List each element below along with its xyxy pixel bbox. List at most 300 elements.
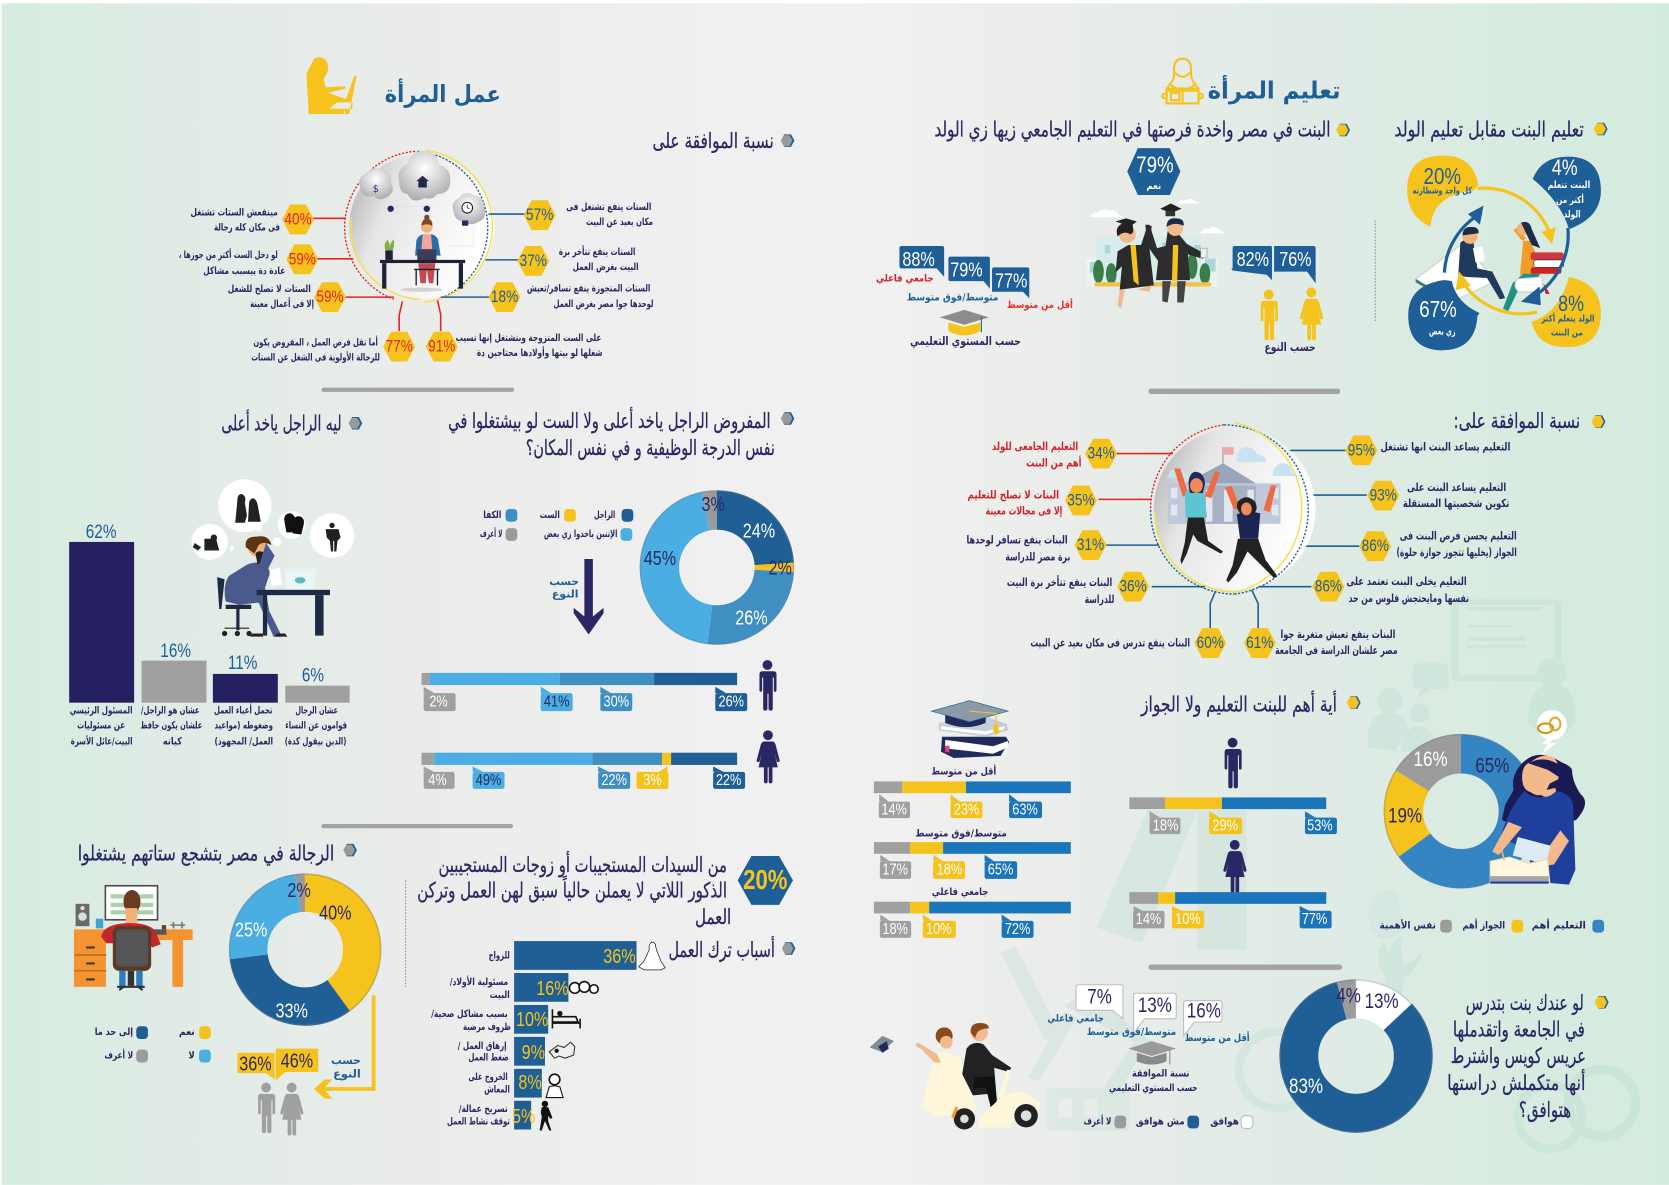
donut labels bbox=[644, 492, 792, 629]
donut labels: 13% bbox=[1365, 990, 1399, 1013]
illustration: graduates bbox=[1086, 199, 1224, 309]
item 59% second child bbox=[179, 244, 353, 277]
blob: 8% boy learns more: الولد يتعلم أكتر bbox=[1540, 312, 1594, 324]
item 35%: إلا فى مجالات معينة bbox=[986, 505, 1062, 518]
statement text: العمل bbox=[695, 905, 731, 930]
stacked bar male: 53% bbox=[1307, 817, 1333, 835]
item 61%: البنات ينفع تعيش متغربة جوا bbox=[1280, 628, 1395, 641]
stacked bar male: 29% bbox=[1212, 817, 1238, 835]
item 59% unfit: الستات لا تصلح للشغل bbox=[228, 284, 311, 295]
label university: جامعي فاعلي bbox=[1047, 1013, 1104, 1024]
bubble 13%: 13% bbox=[1138, 994, 1172, 1018]
donut labels: 24% bbox=[743, 519, 775, 542]
bar retirement: 8% bbox=[518, 1070, 542, 1093]
item 77% bbox=[251, 301, 415, 363]
bar health: 10% bbox=[516, 1007, 548, 1030]
bar labels: البيت/عائل الأسرة bbox=[71, 735, 133, 748]
label below middle: أقل من متوسط bbox=[1007, 298, 1073, 311]
item 36% bbox=[1007, 572, 1205, 606]
item 77%: 77% bbox=[386, 337, 413, 356]
icon: male figure bbox=[1261, 290, 1278, 340]
bar layoffs bbox=[447, 1101, 552, 1131]
donut labels: 2% bbox=[769, 556, 792, 579]
label by gender: حسب النوع bbox=[1265, 340, 1316, 355]
title: women's work bbox=[307, 57, 501, 114]
stacked bar female: 3% bbox=[643, 772, 662, 789]
legend: هوافق bbox=[1210, 1117, 1239, 1128]
legend: الراجل bbox=[594, 510, 615, 521]
item 93%: تكوين شخصيتها المستقلة bbox=[1403, 497, 1509, 510]
bubble 46%: 46% bbox=[281, 1049, 313, 1072]
item 95%: 95% bbox=[1348, 441, 1375, 460]
donut chart bbox=[230, 874, 381, 1025]
icon: flying cap bbox=[870, 1036, 894, 1053]
heading: نسبة الموافقة على: bbox=[1453, 409, 1580, 434]
donut chart bbox=[1280, 980, 1432, 1132]
label agreement: نسبة الموافقة bbox=[1132, 1069, 1189, 1080]
stacked bar male: 26% bbox=[719, 693, 744, 711]
bar health: ظروف مرضية bbox=[463, 1022, 511, 1033]
hexagon 79% yes bbox=[1127, 148, 1180, 195]
stacked bar male: 2% bbox=[429, 693, 448, 711]
stacked bar below middle: 23% bbox=[954, 801, 979, 819]
donut chart bbox=[640, 491, 794, 644]
panel: should man get higher pay bbox=[422, 407, 794, 789]
arrow: yellow by gender: النوع bbox=[333, 1068, 361, 1081]
blob: 4% girl learns more: البنت تتعلم bbox=[1548, 180, 1590, 191]
panel: education or marriage bbox=[874, 690, 1604, 938]
item 36%: للدراسة bbox=[1085, 593, 1114, 606]
bar 62% bbox=[69, 520, 134, 703]
item 61%: مصر علشان الدراسة فى الجامعة bbox=[1275, 644, 1398, 657]
stacked bar university: 10% bbox=[926, 921, 952, 938]
item 18% bbox=[441, 282, 654, 312]
bar labels: وضغوطه (مواعيد bbox=[214, 721, 273, 732]
hexagon 20%: 20% bbox=[743, 865, 787, 896]
stacked bar university bbox=[874, 902, 1071, 938]
heading question: عريس كويس واشترط bbox=[1451, 1044, 1586, 1069]
donut labels: 3% bbox=[701, 492, 725, 515]
arrow: yellow by gender: حسب bbox=[331, 1054, 361, 1067]
bar retirement: الخروج على bbox=[468, 1072, 508, 1083]
item 93%: التعليم يساعد البنت على bbox=[1407, 481, 1506, 494]
donut labels: 33% bbox=[275, 999, 308, 1022]
item 18%: الستات المتجوزة ينفع تسافر/تعيش bbox=[527, 284, 650, 295]
bubble 36%: 36% bbox=[239, 1052, 272, 1075]
legend: نعم bbox=[179, 1027, 195, 1038]
heading: أية أهم للبنت التعليم ولا الجواز bbox=[1140, 690, 1337, 717]
item 40%: فى مكان كله رجالة bbox=[214, 222, 280, 233]
stacked bar female: 22% bbox=[716, 772, 742, 789]
item 91% bbox=[426, 300, 602, 362]
bar labels: المسئول الرئيسي bbox=[70, 706, 133, 717]
bar labels: (الدين بيقول كدة) bbox=[285, 737, 346, 748]
separator bbox=[321, 824, 513, 828]
legend bbox=[480, 509, 633, 541]
bar overwork: ضغط العمل bbox=[468, 1053, 509, 1064]
statement text: من السيدات المستجيبات أو زوجات المستجيبين bbox=[439, 851, 727, 878]
item 60% bbox=[1030, 591, 1226, 658]
donut labels: 4% bbox=[1336, 985, 1361, 1008]
hexagon 79% yes: 79% bbox=[1136, 152, 1174, 178]
arrow: down by gender: حسب bbox=[549, 575, 579, 588]
bubble 88% bbox=[899, 246, 944, 277]
heading question: هتوافق؟ bbox=[1519, 1098, 1571, 1123]
icon: female figure bbox=[1300, 288, 1323, 341]
bar 6%: 6% bbox=[302, 664, 324, 686]
item 59% unfit bbox=[228, 282, 394, 312]
label agreement: حسب المستوي التعليمي bbox=[1109, 1083, 1197, 1094]
cycle arrows bbox=[1444, 188, 1568, 314]
bar labels: قوامون عن النساء bbox=[285, 721, 347, 732]
bar overwork: 9% bbox=[522, 1040, 545, 1063]
label middle: متوسط/فوق متوسط bbox=[907, 293, 998, 304]
stacked bar female: 77% bbox=[1302, 911, 1327, 929]
panel: 20 percent left work bbox=[406, 851, 795, 1131]
donut labels: 83% bbox=[1289, 1075, 1323, 1099]
stacked bar female bbox=[1129, 892, 1332, 929]
stacked bar female: 14% bbox=[1136, 911, 1161, 929]
watermark illustrations bbox=[1001, 599, 1640, 1153]
bar labels: عشان الرجال bbox=[295, 706, 338, 717]
item 91%: 91% bbox=[428, 337, 456, 356]
icon: woman at laptop bbox=[307, 57, 357, 114]
illustration: couple on scooter bbox=[915, 1023, 1040, 1129]
item 36%: البنات ينفع تتأخر برة البيت bbox=[1007, 575, 1112, 589]
separator bbox=[1149, 965, 1342, 970]
bar layoffs: توقف نشاط العمل bbox=[447, 1117, 510, 1128]
item 77%: للرجالة الأولوية فى الشغل عن الستات bbox=[251, 350, 380, 363]
donut labels: 40% bbox=[319, 901, 351, 924]
item 60%: 60% bbox=[1197, 634, 1224, 652]
legend bbox=[95, 1026, 211, 1062]
bar 16%: 16% bbox=[160, 639, 191, 662]
circle with jumping girls bbox=[1151, 423, 1316, 594]
statement text bbox=[417, 851, 731, 930]
bubble 77%: 77% bbox=[995, 268, 1027, 292]
donut chart bbox=[1384, 735, 1538, 888]
circle with working woman bbox=[345, 150, 494, 302]
blob: 20% each by ability: كل واحد وشطارته bbox=[1412, 187, 1473, 197]
donut labels: 65% bbox=[1475, 755, 1509, 778]
bar health bbox=[431, 1005, 580, 1034]
panel: girl's chance in university bbox=[876, 118, 1350, 355]
label below middle: أقل من متوسط bbox=[931, 764, 996, 777]
stacked bar middle: 65% bbox=[988, 861, 1013, 879]
separator dotted bbox=[1374, 220, 1376, 322]
label middle: متوسط/فوق متوسط bbox=[1087, 1027, 1176, 1038]
heading question: أنها متكملش دراستها bbox=[1447, 1069, 1585, 1096]
donut labels: 2% bbox=[287, 878, 311, 902]
bar 6% bbox=[285, 664, 350, 703]
arrow: down by gender bbox=[549, 559, 604, 635]
icon: woman reading bbox=[1162, 59, 1203, 104]
bar labels: عشان هو الراجل/ bbox=[141, 706, 200, 717]
bar layoffs: 5% bbox=[512, 1104, 535, 1127]
item 93%: 93% bbox=[1370, 486, 1397, 505]
item 57%: 57% bbox=[526, 206, 554, 225]
blob: 4% girl learns more: 4% bbox=[1552, 156, 1578, 180]
bar labels: عن مسئوليات bbox=[77, 721, 125, 732]
bar overwork bbox=[458, 1037, 575, 1066]
label below middle: أقل من متوسط bbox=[1185, 1031, 1250, 1044]
item 95% bbox=[1290, 435, 1510, 465]
icon: graduation cap bbox=[940, 310, 989, 335]
illustration: students on book bbox=[1416, 222, 1564, 311]
item 86% independence bbox=[1258, 572, 1469, 605]
heading question: في الجامعة واتقدملها bbox=[1453, 1017, 1585, 1042]
heading reasons: أسباب ترك العمل bbox=[668, 936, 775, 963]
illustration: books and cap bbox=[931, 701, 1009, 758]
item 35%: 35% bbox=[1067, 491, 1095, 510]
blob: 67% same: زي بعض bbox=[1429, 327, 1456, 338]
illustration: worried man at desk bbox=[192, 479, 354, 637]
blob: 8% boy learns more: 8% bbox=[1558, 292, 1584, 317]
stacked bar male: 41% bbox=[544, 693, 570, 711]
item 93% bbox=[1313, 481, 1509, 511]
heading: ليه الراجل ياخد أعلى bbox=[221, 409, 342, 436]
item 91%: على الست المتزوجة وبتشتغل إنها تسيب bbox=[456, 333, 601, 344]
item 86% marriage: التعليم يحسن فرص البنت فى bbox=[1400, 530, 1517, 543]
item 86% marriage: 86% bbox=[1362, 537, 1389, 556]
item 31%: البنات ينفع تسافر لوحدها bbox=[966, 533, 1068, 546]
item 34% bbox=[992, 439, 1173, 470]
item 18%: 18% bbox=[491, 288, 518, 307]
icon: male bbox=[759, 660, 776, 711]
item 95%: التعليم يساعد البنت انها تشتغل bbox=[1381, 441, 1510, 454]
legend bbox=[1084, 1115, 1253, 1128]
bar retirement: المعاش bbox=[484, 1085, 510, 1096]
item 31%: 31% bbox=[1077, 536, 1104, 555]
bubble 79%: 79% bbox=[950, 258, 983, 281]
bubble 79% bbox=[948, 257, 990, 289]
stacked bar below middle: 14% bbox=[881, 801, 907, 819]
legend: الكفا bbox=[483, 510, 501, 521]
blob: 8% boy learns more bbox=[1532, 277, 1601, 347]
legend: لا أعرف bbox=[1084, 1115, 1111, 1128]
item 31% bbox=[966, 530, 1159, 563]
illustration: person at computer bbox=[74, 886, 193, 990]
stacked bar female: 4% bbox=[428, 772, 447, 789]
item 86% independence: 86% bbox=[1315, 577, 1342, 596]
hexagon 79% yes: نعم bbox=[1146, 181, 1161, 192]
bar health: بسبب مشاكل صحية/ bbox=[431, 1009, 508, 1020]
blob: 4% girl learns more: أكتر من bbox=[1556, 193, 1584, 206]
panel: men encourage wives to work bbox=[74, 841, 381, 1136]
legend: لا أعرف bbox=[480, 527, 502, 540]
legend: إلى حد ما bbox=[95, 1027, 133, 1038]
panel: suitor condition bbox=[870, 980, 1609, 1132]
heading: نسبة الموافقة على bbox=[652, 129, 774, 154]
separator bbox=[321, 388, 514, 392]
legend: لا bbox=[188, 1051, 195, 1062]
item 59% second child: لو دخل الست أكتر من جوزها ، bbox=[179, 248, 278, 261]
bubble 7% bbox=[1076, 985, 1123, 1019]
stacked bar female: 10% bbox=[1175, 911, 1201, 929]
donut labels: 45% bbox=[644, 546, 676, 570]
heading question bbox=[1447, 991, 1609, 1123]
bar children bbox=[450, 973, 598, 1002]
panel: girl versus boy education bbox=[1394, 118, 1608, 350]
bar marriage bbox=[489, 941, 665, 970]
heading question: لو عندك بنت بتدرس bbox=[1466, 991, 1584, 1016]
bubble 16%: 16% bbox=[1187, 1000, 1221, 1023]
bubble 88%: 88% bbox=[902, 247, 935, 270]
bubble 82% bbox=[1232, 246, 1272, 280]
bar marriage: 36% bbox=[603, 944, 636, 968]
stacked bar female: 22% bbox=[601, 772, 627, 789]
item 18%: لوحدها جوا مصر بغرض العمل bbox=[553, 299, 654, 310]
bubble 76% bbox=[1274, 246, 1316, 283]
donut labels bbox=[1388, 749, 1509, 828]
item 40% bbox=[191, 205, 346, 234]
statement text: الذكور اللاتي لا يعملن حالياً سبق لهن العمل وتركن bbox=[417, 875, 727, 904]
legend: مش هوافق bbox=[1136, 1117, 1185, 1128]
bar labels: العمل/ المجهود) bbox=[214, 737, 273, 748]
bar layoffs: تسريح عمالة/ bbox=[459, 1104, 508, 1115]
item 36%: 36% bbox=[1119, 577, 1147, 596]
item 57%: الستات ينفع تشتغل فى bbox=[566, 202, 651, 213]
icon: male bbox=[1225, 738, 1242, 788]
bar children: البيت bbox=[490, 990, 510, 1001]
item 37%: البيت بغرض العمل bbox=[573, 262, 639, 273]
legend: التعليم أهم bbox=[1532, 919, 1586, 932]
icon: female gray bbox=[280, 1083, 303, 1136]
stacked bar male: 30% bbox=[604, 693, 629, 711]
icon: female bbox=[1223, 840, 1247, 893]
item 37%: 37% bbox=[520, 252, 547, 270]
bar labels bbox=[70, 704, 347, 748]
icon: gray cap bbox=[1128, 1041, 1176, 1065]
bar marriage: للزواج bbox=[489, 950, 510, 961]
item 91%: شغلها لو بيتها وأولادها محتاجين دة bbox=[477, 346, 602, 359]
donut labels: 16% bbox=[1414, 749, 1448, 772]
stacked bar male: 18% bbox=[1153, 817, 1178, 835]
item 40%: 40% bbox=[284, 210, 312, 229]
heading: المفروض الراجل ياخد أعلى ولا الست لو بيشتغلوا في bbox=[448, 407, 771, 434]
item 60%: البنات ينفع تدرس فى مكان بعيد عن البيت bbox=[1030, 637, 1190, 650]
bubble 46% bbox=[276, 1049, 318, 1081]
bar labels: علشان يكون حافظ bbox=[141, 721, 202, 732]
item 37% bbox=[485, 245, 639, 276]
stacked bar below middle: 63% bbox=[1012, 801, 1038, 819]
illustration: woman reading book bbox=[1490, 755, 1585, 885]
bubble 16% bbox=[1184, 1000, 1222, 1036]
item 59% unfit: 59% bbox=[316, 288, 344, 307]
stacked bar male bbox=[422, 673, 747, 711]
item 34%: 34% bbox=[1088, 444, 1115, 463]
item 86% marriage: الجواز (يخليها تتجوز جوازة حلوة) bbox=[1397, 546, 1517, 559]
item 86% independence: التعليم يخلى البنت تعتمد على bbox=[1346, 575, 1467, 588]
item 86% independence: نفسها ومايحتجش فلوس من حد bbox=[1349, 592, 1469, 605]
blob: 4% girl learns more: الولد bbox=[1564, 210, 1581, 221]
panel: agreement on education bbox=[966, 409, 1605, 658]
icon: male gray bbox=[258, 1083, 275, 1133]
donut labels bbox=[1289, 985, 1399, 1099]
stacked bar middle: 17% bbox=[882, 861, 908, 879]
blob: 4% girl learns more bbox=[1533, 156, 1601, 229]
label university: جامعي فاعلي bbox=[876, 274, 933, 285]
label agreement bbox=[1109, 1069, 1197, 1094]
donut labels: 26% bbox=[735, 606, 768, 629]
item 57% bbox=[489, 200, 653, 230]
legend: نفس الأهمية bbox=[1379, 919, 1436, 932]
bubble 77% bbox=[992, 267, 1029, 298]
item 59% unfit: إلا فى أعمال معينة bbox=[250, 297, 314, 310]
stacked bar middle: 18% bbox=[937, 861, 962, 879]
bar 11%: 11% bbox=[228, 651, 257, 673]
bubble 76%: 76% bbox=[1279, 247, 1312, 270]
bar overwork: إرهاق العمل / bbox=[458, 1041, 507, 1052]
item 40%: مينفعش الستات تشتغل bbox=[191, 208, 278, 219]
heading bbox=[448, 407, 794, 461]
blob: 67% same: 67% bbox=[1419, 297, 1457, 323]
donut labels: 25% bbox=[235, 918, 267, 941]
icon: female bbox=[757, 730, 780, 783]
hexagon 20% bbox=[738, 856, 793, 905]
stacked bar female: 49% bbox=[476, 772, 501, 789]
bar retirement bbox=[468, 1069, 563, 1098]
item 34%: أهم من البنت bbox=[1026, 456, 1081, 470]
item 61% bbox=[1244, 590, 1398, 658]
label by education: حسب المستوي التعليمي bbox=[910, 334, 1021, 349]
stacked bar university: 18% bbox=[882, 921, 908, 938]
bar 11% bbox=[213, 651, 278, 703]
legend: لا أعرف bbox=[104, 1049, 133, 1062]
item 34%: التعليم الجامعى للولد bbox=[992, 440, 1078, 453]
title: women's education bbox=[1162, 59, 1341, 105]
item 37%: الستات ينفع تتأخر برة bbox=[559, 245, 635, 258]
title: women's education: تعليم المرأة bbox=[1208, 75, 1341, 105]
item 59% second child: عادة دة بيسبب مشاكل bbox=[203, 266, 285, 277]
item 31%: برة مصر للدراسة bbox=[1005, 550, 1070, 563]
label university: جامعي فاعلي bbox=[932, 887, 988, 898]
bar labels: تحمل أعباء العمل bbox=[214, 704, 273, 717]
panel: why man gets higher bbox=[69, 409, 362, 748]
blob: 67% same bbox=[1408, 280, 1480, 350]
item 86% marriage bbox=[1306, 530, 1517, 561]
stacked bar university: 72% bbox=[1005, 921, 1030, 938]
stacked bar below middle bbox=[874, 781, 1071, 819]
item 61%: 61% bbox=[1246, 634, 1274, 652]
blob: 20% each by ability bbox=[1407, 156, 1478, 227]
stacked bar middle bbox=[874, 842, 1071, 879]
arrow: down by gender: النوع bbox=[552, 588, 579, 601]
bar children: مسئولية الأولاد/ bbox=[450, 975, 508, 988]
blob: 20% each by ability: 20% bbox=[1424, 164, 1461, 190]
circle with working woman: $ bbox=[373, 184, 379, 195]
donut labels bbox=[235, 878, 351, 1022]
legend: الإتنين ياخدوا زي بعض bbox=[544, 529, 617, 540]
heading: نفس الدرجة الوظيفية و في نفس المكان؟ bbox=[526, 436, 775, 461]
item 35% bbox=[968, 486, 1152, 518]
bar labels: كيانه bbox=[163, 737, 182, 748]
bar children: 16% bbox=[536, 976, 569, 1000]
legend: الست bbox=[540, 510, 560, 521]
donut labels: 19% bbox=[1388, 805, 1422, 828]
label middle: متوسط/فوق متوسط bbox=[915, 829, 1007, 840]
bar 62%: 62% bbox=[86, 520, 116, 542]
arrow: yellow by gender bbox=[314, 995, 374, 1099]
icon: wedding rings bubble bbox=[1537, 710, 1567, 755]
bubble 13% bbox=[1134, 993, 1176, 1034]
bubble 7%: 7% bbox=[1087, 986, 1112, 1009]
divider dotted bbox=[405, 880, 407, 987]
bubble 82%: 82% bbox=[1237, 247, 1269, 270]
stacked bar male bbox=[1129, 797, 1337, 835]
heading: البنت في مصر واخدة فرصتها في التعليم الجامعي زيها زي الولد bbox=[935, 118, 1331, 143]
panel: agreement on work bbox=[179, 129, 794, 363]
